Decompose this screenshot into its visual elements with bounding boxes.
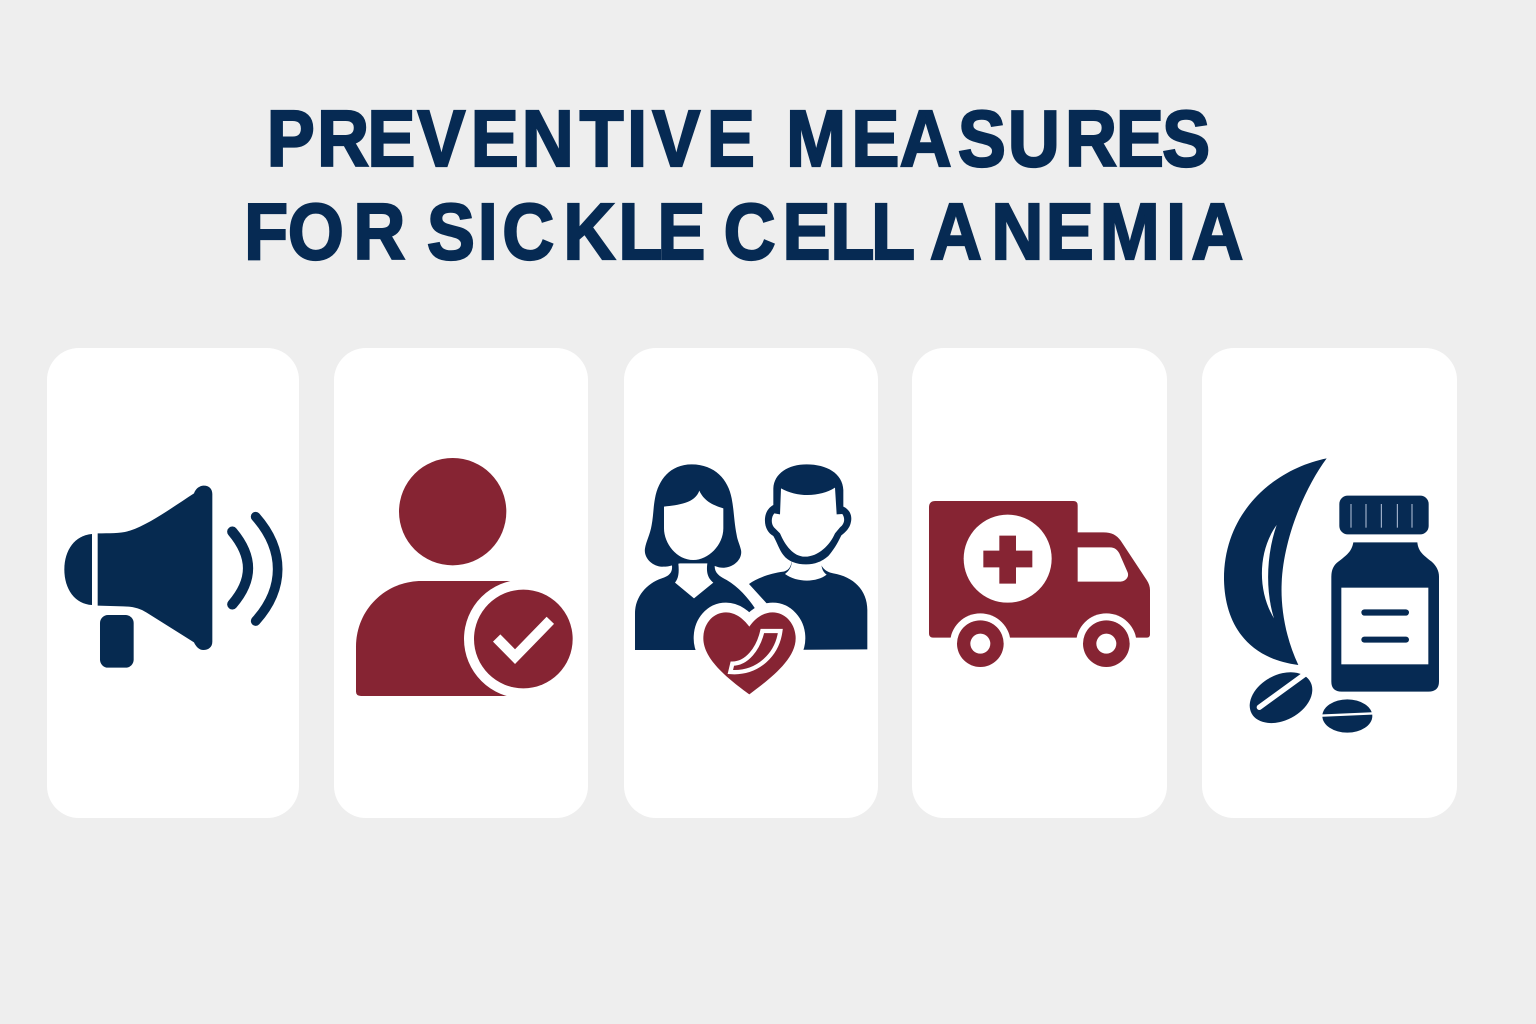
title: FOR SICKLE CELL ANEMIA <box>244 187 1243 277</box>
panel: supplements <box>1202 348 1457 818</box>
icon: couple with heart <box>635 464 867 694</box>
icon: person with check mark <box>356 458 583 710</box>
panel: emergency care <box>912 348 1167 818</box>
title <box>244 94 1243 277</box>
icon: heart with sickle cell <box>703 612 796 694</box>
panel: family counselling <box>624 348 878 818</box>
title: PREVENTIVE MEASURES <box>267 94 1210 184</box>
icon: ambulance <box>929 501 1150 674</box>
icon: leaf, pills and bottle <box>1224 458 1439 733</box>
icon: megaphone <box>64 486 278 668</box>
panel: screening <box>334 348 588 818</box>
panel: awareness <box>47 348 299 818</box>
